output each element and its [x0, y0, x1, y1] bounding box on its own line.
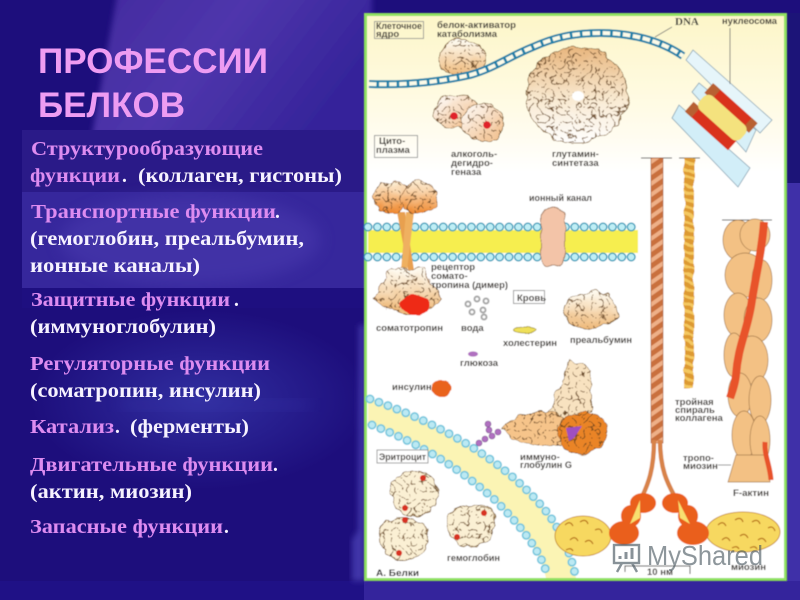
label: cytoplasm: Цито- [379, 136, 405, 147]
item: catalysis: (ферменты) [130, 417, 249, 438]
label: glucose: глюкоза [460, 358, 499, 369]
label: blood: Кровь [517, 293, 546, 304]
label: alcohol dehydrogenase: алкоголь- [451, 149, 497, 160]
label: alcohol dehydrogenase: дегидро- [451, 158, 493, 169]
item: structural: функции [30, 165, 120, 187]
icon: glucose [468, 351, 478, 357]
label: collagen: тройная [675, 397, 714, 408]
label: glutamine synthetase [552, 149, 599, 169]
icon: myosin heads left [555, 493, 656, 556]
icon: glutamine synthetase [526, 47, 628, 143]
list: protein functions [30, 138, 342, 538]
label: tropomyosin: миозин [683, 461, 718, 472]
item: structural: (коллаген, гистоны) [138, 166, 342, 187]
F-actin filament [722, 219, 772, 482]
membrane: plasma [368, 227, 638, 257]
label: prealbumin: преальбумин [570, 335, 632, 346]
collagen triple helix [641, 158, 700, 497]
label: collagen [675, 397, 724, 424]
somatotropin receptor [373, 182, 442, 315]
icon: water molecules [466, 296, 488, 320]
item: transport: (гемоглобин, преальбумин, [30, 229, 304, 250]
watermark: MyShared: MyShared [647, 540, 763, 571]
item: storage: Запасные функции [30, 516, 223, 538]
icon: prealbumin [563, 291, 617, 329]
label: tropomyosin: тропо- [683, 453, 714, 464]
item: structural: . [122, 166, 127, 187]
item: structural [30, 138, 342, 187]
title: БЕЛКОВ [38, 86, 185, 125]
label: nucleosome: нуклеосома [722, 16, 778, 27]
scale bar: 10 nm: 10 нм [647, 567, 673, 578]
icon: cholesterol [514, 327, 536, 333]
label: collagen: коллагена [675, 413, 724, 424]
label: alcohol dehydrogenase: геназа [451, 167, 482, 178]
item: regulatory [30, 353, 270, 402]
title [38, 42, 268, 125]
label: water: вода [461, 323, 484, 334]
icon: hemoglobin molecules [379, 471, 496, 560]
item: catalysis: Катализ [30, 416, 114, 438]
label: cytoplasm: плазма [376, 145, 411, 156]
item: transport [30, 201, 304, 277]
item: catalysis [30, 416, 249, 438]
item: motor: (актин, миозин) [30, 482, 192, 503]
label: immunoglobulin G [520, 452, 572, 471]
membrane: erythrocyte [368, 398, 576, 578]
tropomyosin strand [684, 158, 694, 388]
label: nucleosome [722, 16, 778, 84]
DNA helix [369, 33, 683, 84]
item: protective: Защитные функции [31, 289, 230, 311]
icon: insulin [431, 380, 451, 396]
item: transport: ионные каналы) [30, 256, 200, 277]
label: glutamine synthetase: синтетаза [552, 158, 599, 169]
panel: protein diagram [366, 14, 786, 580]
label: activator [437, 20, 516, 40]
label: DNA: DNA [675, 16, 699, 28]
label: somatotropin: соматотропин [376, 323, 443, 334]
item: structural: Структурообразующие [31, 138, 263, 160]
label: collagen: спираль [675, 405, 715, 416]
item: protective [30, 289, 239, 338]
item: regulatory: (соматропин, инсулин) [30, 381, 261, 402]
labels: nucleus: ядро [376, 29, 399, 40]
item: protective: (иммуноглобулин) [30, 317, 216, 338]
ion channel [541, 208, 565, 266]
item: catalysis: . [115, 417, 120, 438]
label: F-actin: F-актин [733, 488, 769, 499]
label: immunoglobulin G: иммуно- [520, 452, 560, 463]
icon: catabolism activator protein [439, 40, 485, 76]
label: erythrocyte: Эритроцит [379, 452, 426, 463]
title: ПРОФЕССИИ [38, 42, 268, 81]
panel frame [366, 14, 786, 580]
label: receptor: сомато- [431, 271, 468, 282]
label: insulin: инсулин [392, 382, 432, 393]
icon: immunoglobulin G [476, 360, 607, 454]
item: transport: . [275, 202, 280, 223]
label: receptor: рецептор [431, 262, 475, 273]
label: alcohol dehydrogenase [451, 149, 497, 178]
icon: alcohol dehydrogenase [434, 95, 504, 141]
label: proteins: А. Белки [376, 568, 419, 579]
icon: presentation board [614, 545, 639, 572]
item: motor: . [273, 455, 278, 476]
label: myosin: миозин [731, 562, 766, 573]
label: ion channel: ионный канал [529, 193, 592, 204]
item: regulatory: Регуляторные функции [30, 353, 270, 375]
icon: myosin heads right [662, 493, 780, 552]
scale bar: 10 nm [625, 566, 690, 578]
label: hemoglobin: гемоглобин [447, 553, 500, 564]
labels: nucleus: Клеточное [376, 21, 422, 32]
item: transport: Транспортные функции [31, 201, 276, 223]
labels: nucleus [374, 21, 424, 40]
label: DNA [655, 16, 699, 37]
label: activator: катаболизма [437, 29, 498, 40]
item: storage: . [224, 517, 229, 538]
label: glutamine synthetase: глутамин- [552, 149, 599, 160]
label: activator: белок-активатор [437, 20, 516, 31]
label: receptor [431, 262, 508, 291]
label: cytoplasm [374, 136, 418, 158]
label: cholesterol: холестерин [503, 338, 557, 349]
item: protective: . [234, 290, 239, 311]
label: immunoglobulin G: глобулин G [520, 460, 572, 471]
icon: nucleosome [672, 50, 772, 187]
label: tropomyosin [683, 453, 731, 472]
label: receptor: тропина (димер) [431, 280, 508, 291]
item: motor: Двигательные функции [30, 454, 273, 476]
item: motor [30, 454, 278, 503]
